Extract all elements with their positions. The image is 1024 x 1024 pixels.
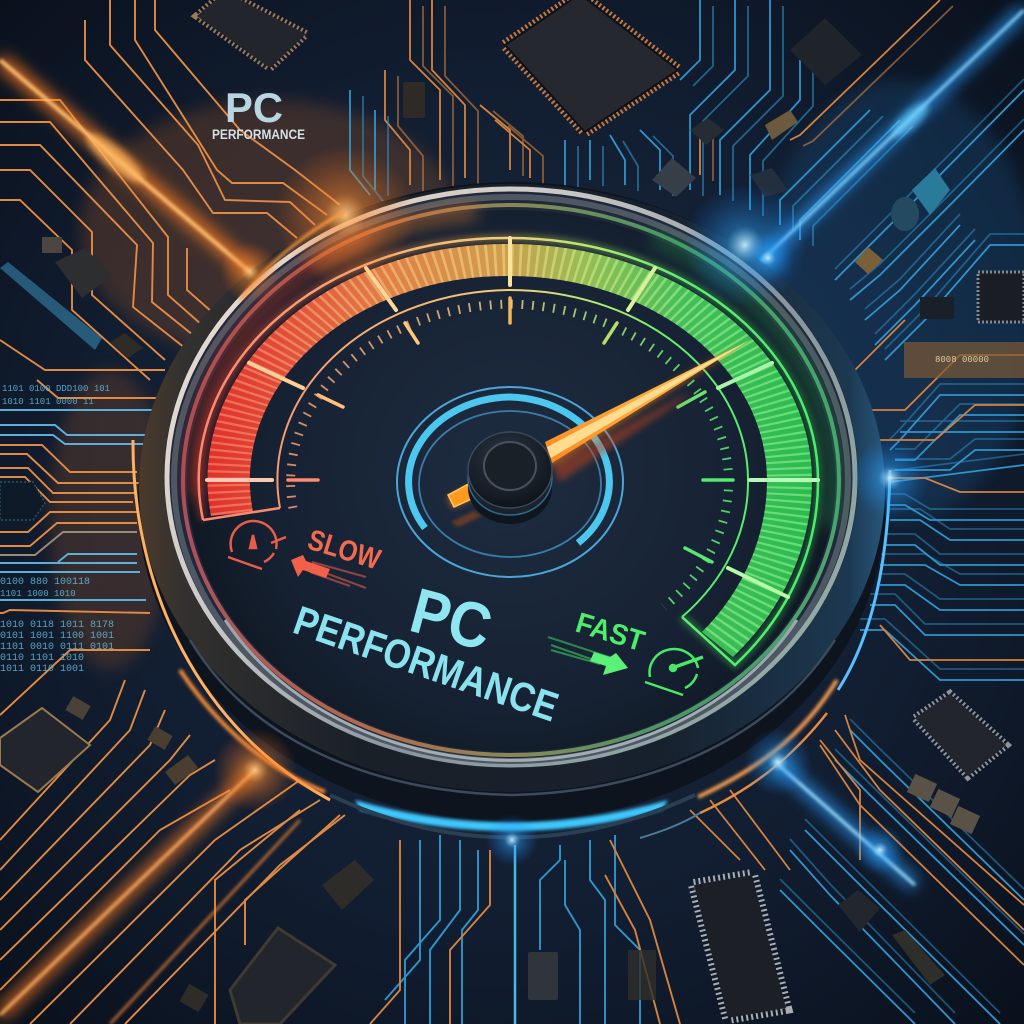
warm haze: top left xyxy=(80,100,460,360)
blue burst: bottom centre xyxy=(486,814,538,866)
chip: large top centre xyxy=(505,0,678,132)
circuit traces: right orange xyxy=(690,320,1024,965)
chip: top left xyxy=(197,0,306,68)
chip: right lower xyxy=(907,694,1006,834)
circuit traces: top xyxy=(350,0,940,240)
title: performance: PERFORMANCE xyxy=(288,597,564,730)
slow arrow xyxy=(291,555,366,588)
warm haze: left side xyxy=(50,370,170,670)
inner scale arc xyxy=(277,290,748,617)
blue burst: top right of gauge xyxy=(683,183,807,307)
small components: left xyxy=(0,237,143,520)
circuit traces: left orange xyxy=(0,0,345,1024)
circuit traces: bottom xyxy=(370,835,680,1024)
left orange rim glow xyxy=(133,440,330,800)
binary data text: left: 1011 0110 1001 xyxy=(0,664,84,675)
gauge housing xyxy=(133,182,890,838)
blue burst: right side xyxy=(850,438,930,518)
binary data text: left: 1010 0118 1011 8178 xyxy=(0,620,114,631)
blue burst: lower right node xyxy=(854,824,906,876)
needle hub xyxy=(468,432,552,524)
icon: fast gauge xyxy=(645,649,703,695)
bottom glowing cyan bar xyxy=(355,800,668,831)
small components: right: 8008 00000 xyxy=(935,355,989,365)
binary data text: left xyxy=(0,384,114,675)
glow streak: blue bottom-right xyxy=(775,762,915,885)
needle xyxy=(447,340,750,527)
binary data text: left: 1101 1000 1010 xyxy=(0,589,76,599)
small components: right xyxy=(855,168,1024,378)
gauge bezel xyxy=(164,186,858,768)
blue burst: bottom right xyxy=(744,728,812,796)
lower housing step xyxy=(190,640,835,795)
circuit traces: right blue xyxy=(780,90,1024,1024)
heading: top-left label xyxy=(212,84,305,142)
binary data text: left: 1101 0010 0111 0101 xyxy=(0,642,114,653)
binary data text: left: 0101 1001 1100 1001 xyxy=(0,631,114,642)
speed scale band xyxy=(199,238,818,705)
small components: top xyxy=(403,18,862,197)
right orange rim glow xyxy=(698,680,837,797)
chip: left lower xyxy=(0,696,198,792)
orange burst: bottom left xyxy=(213,728,297,812)
glow streak: blue top-right xyxy=(760,10,1024,262)
glow streak: orange bottom-left xyxy=(0,770,300,1024)
orange burst: top left of gauge xyxy=(220,145,415,302)
fast label: FAST xyxy=(572,607,648,658)
circuit traces: left blue xyxy=(0,410,157,600)
minor ticks xyxy=(291,304,729,607)
gauge face xyxy=(187,210,835,752)
chip: bottom left xyxy=(179,860,374,1024)
slow label: SLOW xyxy=(304,524,385,576)
major ticks xyxy=(207,238,818,597)
icon: slow gauge xyxy=(228,521,286,569)
heading: top-left label: PERFORMANCE xyxy=(212,127,305,142)
binary data text: left: 1101 0100 DDD100 101 xyxy=(2,384,110,394)
circuit traces: right, second layer xyxy=(780,79,1024,1013)
circuit traces: top, second layer xyxy=(363,6,953,246)
chip: bottom centre and right xyxy=(528,875,945,1018)
glow streak: orange top-left xyxy=(0,60,250,272)
cool haze: right side xyxy=(760,80,1024,520)
binary data text: left: 1010 1101 0000 11 xyxy=(2,397,94,407)
binary data text: left: 0100 880 100118 xyxy=(0,577,90,588)
inner ticks xyxy=(288,298,733,562)
heading: top-left label: PC xyxy=(225,84,283,131)
fast arrow xyxy=(548,637,628,675)
blue hub rings xyxy=(397,387,623,577)
right blue rim line xyxy=(838,470,890,690)
title: PC: PC xyxy=(403,574,499,664)
binary data text: left: 0110 1101 1010 xyxy=(0,653,84,664)
